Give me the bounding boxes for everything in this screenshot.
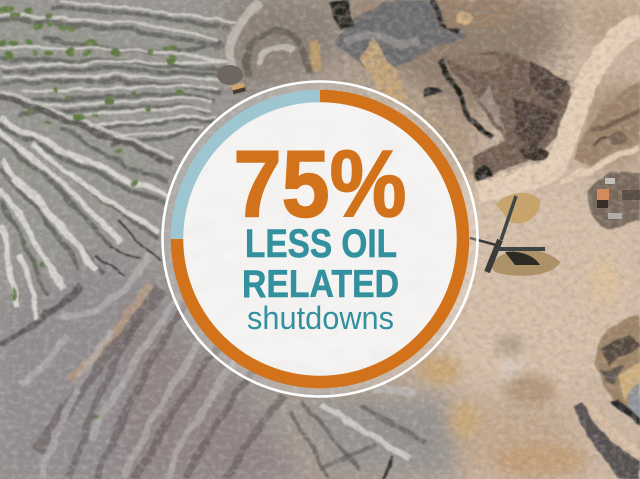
conveyor machine and sand pile [470, 193, 560, 276]
donut chart: 75 percent [177, 96, 463, 382]
extra rock texture [330, 0, 575, 185]
orange-roof building in scrapyard [597, 178, 640, 219]
left terraces: horizontal benches [0, 2, 235, 145]
dark mound and small building at upper centre [217, 65, 246, 94]
right earth patch with mounds [575, 80, 640, 165]
lower left diagonal tracks [0, 255, 360, 479]
dirt roads [478, 22, 640, 192]
translucent band inside the white ring [163, 82, 477, 396]
lower centre grey terraces [322, 390, 425, 479]
shrubs on terraces [0, 6, 184, 417]
remaining 25 percent arc [177, 96, 320, 239]
central brown rock mass [425, 50, 570, 182]
lower dark stripe [572, 400, 640, 479]
inner white disc [182, 102, 458, 376]
left terraces: fan of radiating ridges [0, 92, 175, 318]
label: shutdowns: shutdowns [247, 300, 394, 336]
lower right earth patch [596, 315, 640, 425]
upper rock: blue grey spoil heap [330, 0, 520, 105]
headline number: 75% [234, 132, 406, 238]
spiral dirt track upper centre [230, 2, 318, 85]
white outer ring [162, 82, 478, 396]
lower centre sand and gravel patches [418, 256, 619, 476]
scrapyard patch [587, 172, 640, 228]
label: related: RELATED [242, 263, 399, 306]
label: less oil: LESS OIL [245, 222, 397, 266]
75 percent arc [177, 96, 463, 382]
